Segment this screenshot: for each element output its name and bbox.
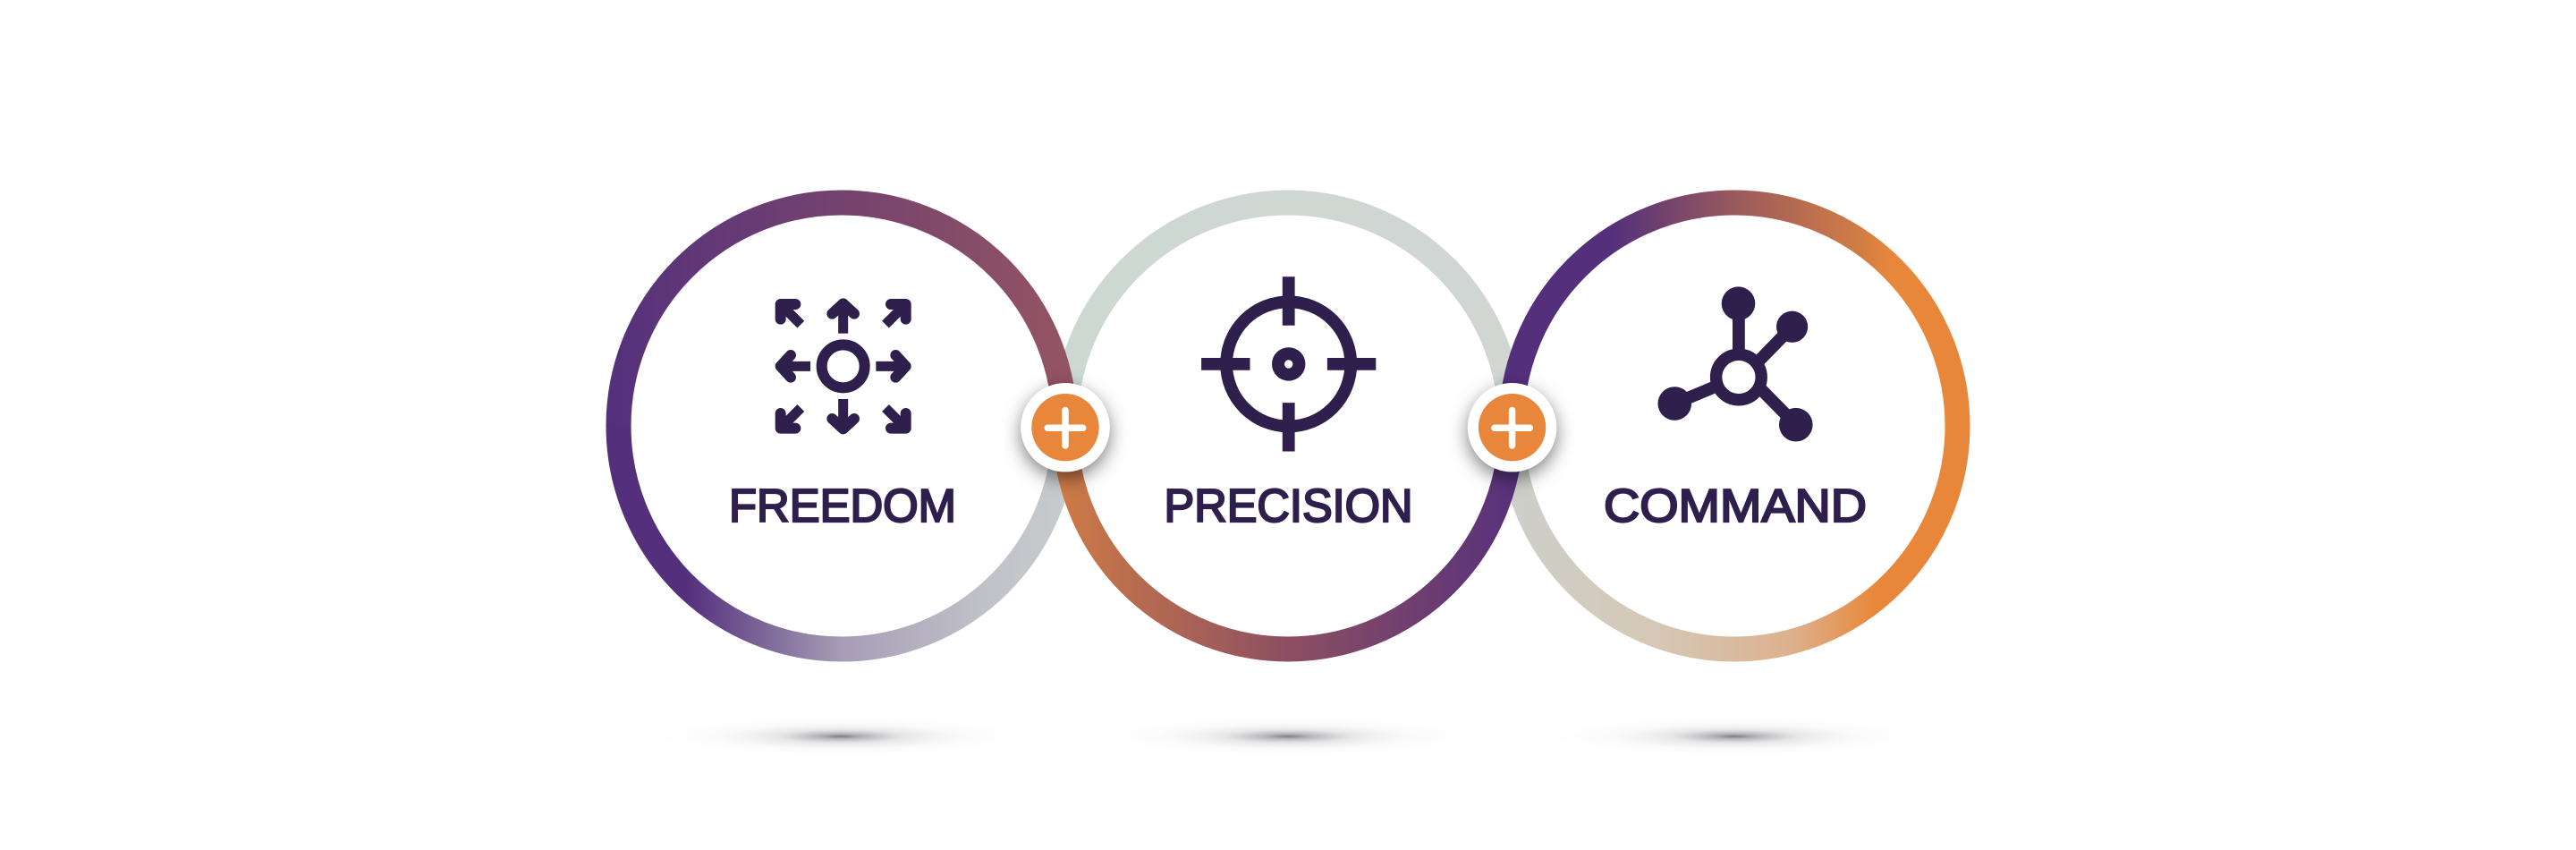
label: freedom: FREEDOM bbox=[729, 480, 956, 531]
plus badge: freedom and precision bbox=[1021, 383, 1110, 472]
floor shadows bbox=[657, 717, 1918, 756]
ring: command bottom arc bbox=[1512, 426, 1957, 650]
ring: command top arc bbox=[1512, 203, 1957, 426]
icon: crosshair target bbox=[1201, 276, 1376, 451]
icon: hub and spoke network bbox=[1658, 286, 1813, 442]
ring: precision top arc bbox=[1064, 203, 1512, 426]
ring: freedom bottom arc bbox=[619, 426, 1064, 650]
ring: precision bottom arc bbox=[1064, 426, 1512, 650]
icon: arrows expanding from a central circle bbox=[781, 303, 906, 429]
label: precision: PRECISION bbox=[1165, 480, 1413, 531]
label: command: COMMAND bbox=[1604, 480, 1867, 531]
ring: freedom top arc bbox=[619, 203, 1064, 426]
interlocking rings bbox=[619, 203, 1957, 650]
plus badge: precision and command bbox=[1468, 383, 1556, 472]
